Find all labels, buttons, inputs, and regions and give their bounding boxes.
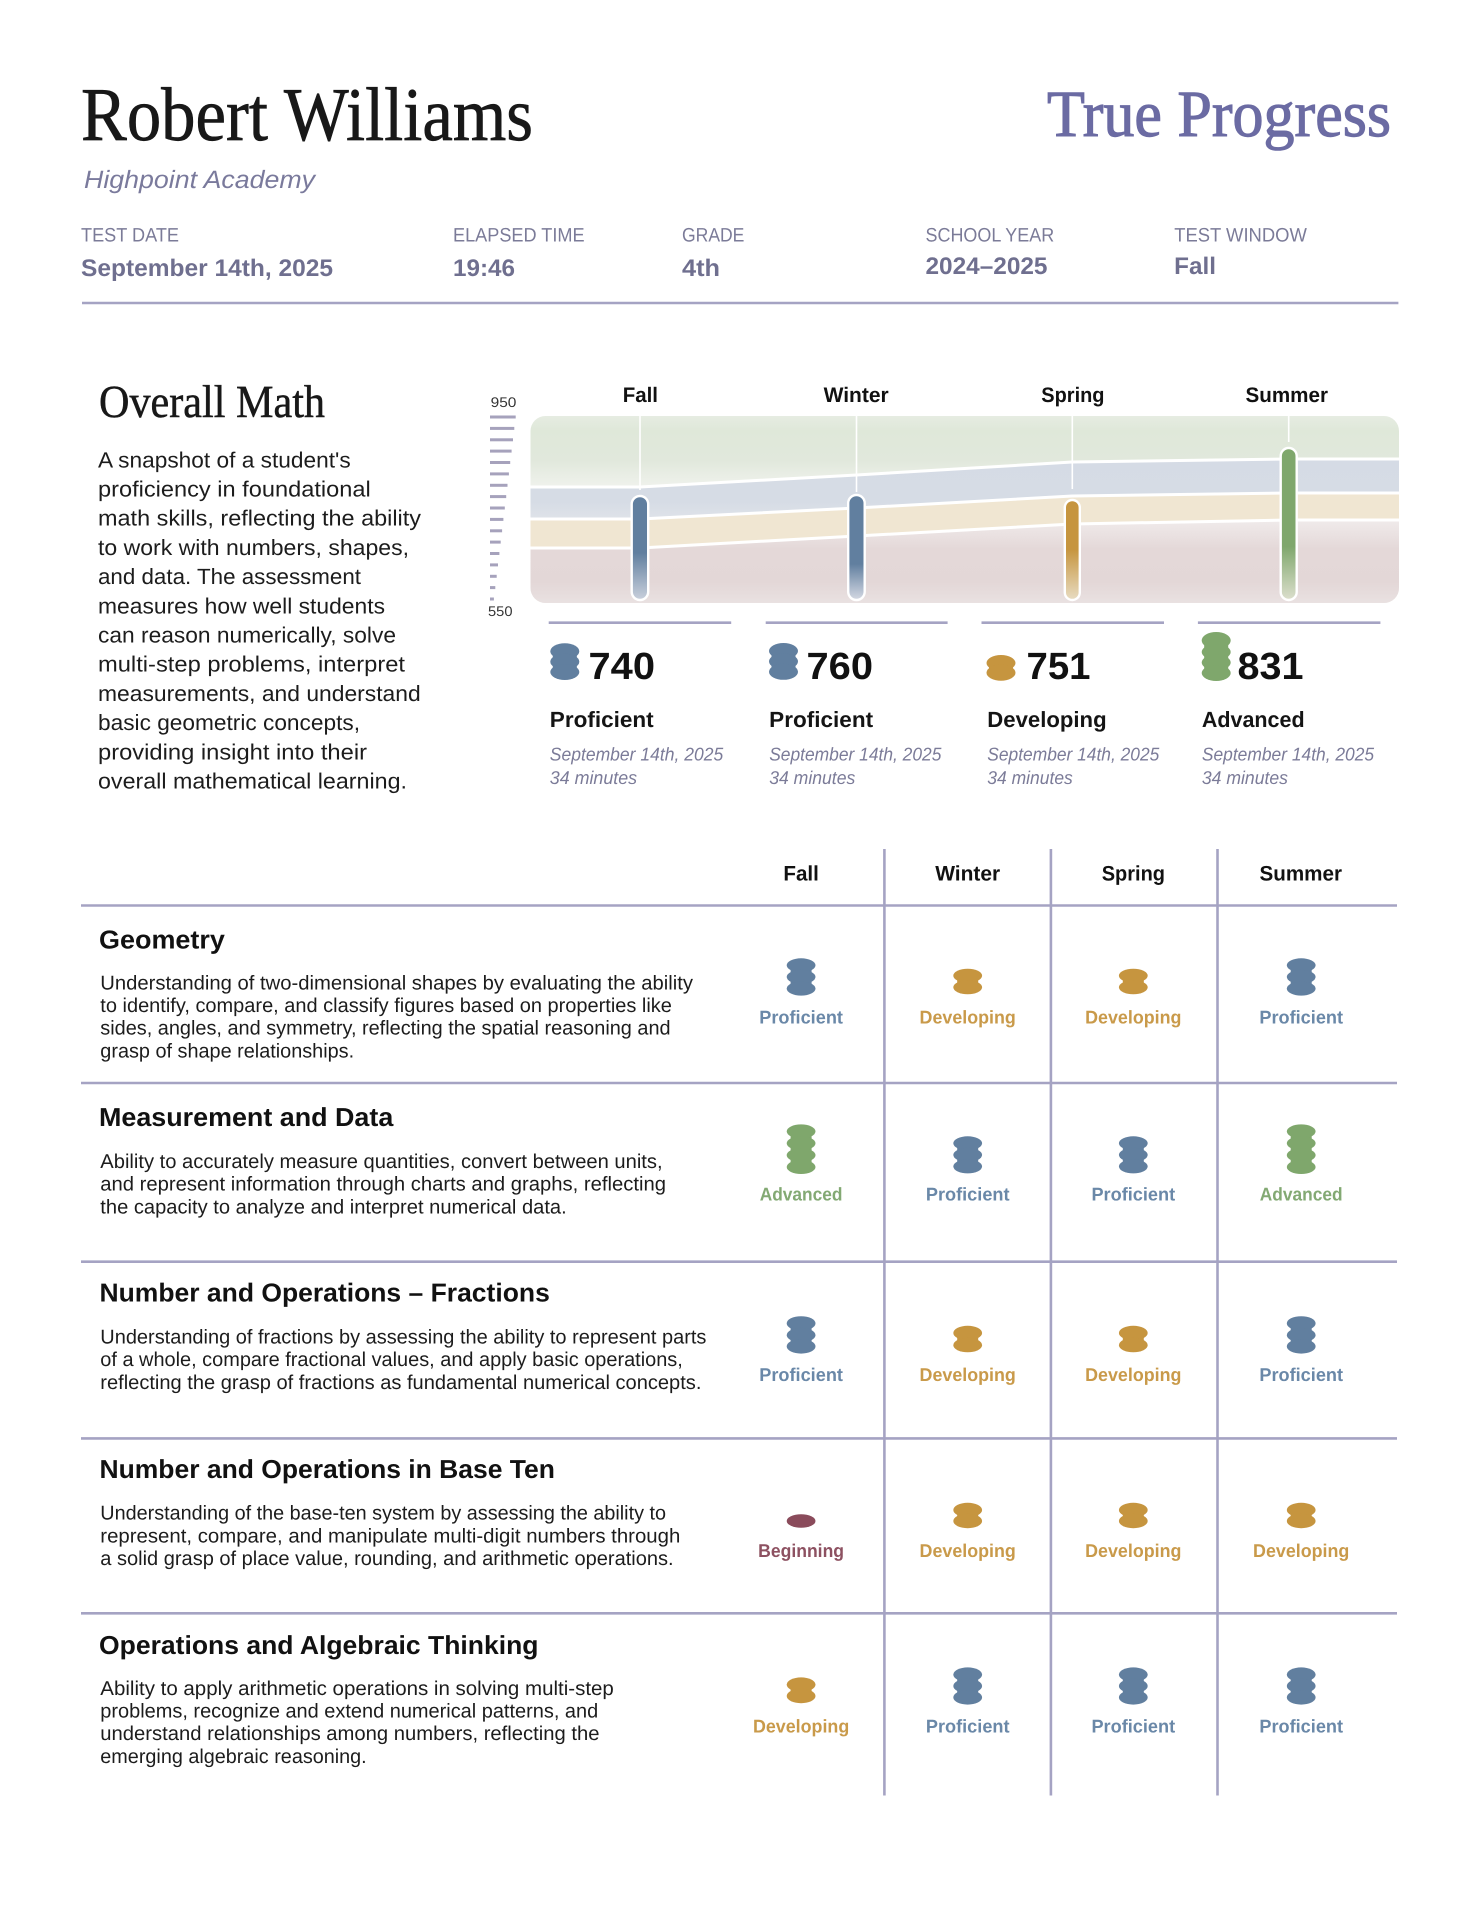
panel: overall math summary xyxy=(98,376,421,793)
row description: emerging algebraic reasoning. xyxy=(100,1746,367,1768)
result: spring developing: Developing xyxy=(1085,1364,1181,1385)
result: fall proficient xyxy=(759,1316,843,1385)
row description: a solid grasp of place value, rounding, and arithmetic operations. xyxy=(100,1548,674,1570)
result: fall developing: Developing xyxy=(753,1715,849,1736)
season labels: Winter xyxy=(824,384,889,407)
score card: fall xyxy=(549,623,731,788)
result: winter developing: Developing xyxy=(920,1364,1016,1385)
column headers: Spring xyxy=(1102,863,1165,886)
result: spring developing xyxy=(1085,1326,1181,1385)
result: winter proficient: Proficient xyxy=(926,1715,1010,1736)
date and duration: September 14th, 2025 xyxy=(987,744,1160,765)
brand title: True Progress xyxy=(1047,78,1391,151)
score: 751 xyxy=(1026,646,1090,688)
row: number and operations fractions xyxy=(100,1278,1343,1394)
row description: Ability to apply arithmetic operations in solving multi-step xyxy=(100,1678,614,1700)
row: operations and algebraic thinking xyxy=(99,1630,1343,1768)
chart: score progress bands xyxy=(488,384,1399,619)
result: winter proficient xyxy=(926,1667,1010,1736)
icon: developing stack xyxy=(986,655,1016,681)
result: fall advanced: Advanced xyxy=(760,1184,842,1205)
school year xyxy=(926,224,1054,280)
row description: to identify, compare, and classify figures based on properties like xyxy=(100,995,672,1017)
row heading: Number and Operations – Fractions xyxy=(100,1278,550,1308)
test window xyxy=(1174,224,1307,280)
icon: advanced stack xyxy=(1202,632,1231,681)
test window: Fall xyxy=(1174,253,1216,280)
result: fall advanced xyxy=(760,1124,842,1205)
result: winter proficient: Proficient xyxy=(926,1184,1010,1205)
level: Proficient xyxy=(550,707,654,732)
result: spring proficient xyxy=(1091,1136,1175,1205)
row description: Understanding of two-dimensional shapes by evaluating the ability xyxy=(100,972,693,994)
result: summer advanced: Advanced xyxy=(1260,1184,1343,1205)
score: 740 xyxy=(588,646,655,688)
row description xyxy=(100,1151,666,1218)
date and duration xyxy=(1202,744,1375,788)
elapsed time: ELAPSED TIME xyxy=(453,224,585,246)
result: summer proficient: Proficient xyxy=(1259,1364,1343,1385)
score bars xyxy=(632,448,1297,600)
date and duration: 34 minutes xyxy=(550,767,637,788)
result: spring developing: Developing xyxy=(1085,1540,1181,1561)
result: summer developing: Developing xyxy=(1253,1540,1349,1561)
result: fall proficient: Proficient xyxy=(759,1364,843,1385)
row description: Ability to accurately measure quantities, convert between units, xyxy=(100,1151,663,1173)
score card: summer xyxy=(1198,623,1380,788)
test date: September 14th, 2025 xyxy=(81,255,333,282)
heading: overall math: Overall Math xyxy=(99,376,325,427)
column headers: Fall xyxy=(783,863,819,886)
column headers: Winter xyxy=(935,863,1000,886)
date and duration: September 14th, 2025 xyxy=(550,744,724,765)
row description: understand relationships among numbers, reflecting the xyxy=(100,1723,600,1745)
result: spring proficient: Proficient xyxy=(1091,1184,1175,1205)
description text: and data. The assessment xyxy=(98,564,361,589)
date and duration: 34 minutes xyxy=(987,767,1073,788)
result: fall beginning: Beginning xyxy=(758,1540,844,1561)
icon: proficient stack xyxy=(550,643,579,680)
student name: Robert Williams xyxy=(81,73,533,157)
result: summer advanced xyxy=(1260,1124,1343,1205)
bar: summer xyxy=(1281,448,1297,600)
date and duration: September 14th, 2025 xyxy=(1202,744,1375,765)
score: 831 xyxy=(1238,646,1304,688)
column headers xyxy=(783,863,1342,886)
result: summer proficient xyxy=(1259,958,1343,1027)
school year: 2024–2025 xyxy=(926,253,1048,280)
proficiency bands xyxy=(530,416,1399,603)
result: winter developing xyxy=(920,969,1016,1027)
row heading: Operations and Algebraic Thinking xyxy=(99,1630,538,1660)
score card: winter xyxy=(766,623,948,788)
result: spring developing xyxy=(1085,1503,1181,1561)
description text: to work with numbers, shapes, xyxy=(98,535,409,560)
description text: measures how well students xyxy=(98,593,385,618)
result: fall proficient xyxy=(759,958,843,1027)
elapsed time: 19:46 xyxy=(453,255,515,282)
date and duration xyxy=(987,744,1160,788)
season labels: Spring xyxy=(1041,384,1104,407)
date and duration: 34 minutes xyxy=(769,767,855,788)
result: summer proficient: Proficient xyxy=(1259,1715,1343,1736)
row description: problems, recognize and extend numerical patterns, and xyxy=(100,1701,598,1723)
row description xyxy=(100,1326,706,1394)
result: spring developing xyxy=(1085,969,1181,1027)
result: fall proficient: Proficient xyxy=(759,1006,843,1027)
table: domain results xyxy=(81,849,1397,1796)
description text: providing insight into their xyxy=(98,739,367,764)
score scale xyxy=(488,394,517,619)
row: measurement and data xyxy=(99,1102,1343,1218)
result: summer proficient xyxy=(1259,1316,1343,1385)
row description: Understanding of the base-ten system by assessing the ability to xyxy=(100,1503,666,1525)
description text: basic geometric concepts, xyxy=(98,710,360,735)
season labels: Fall xyxy=(623,384,658,407)
icon: proficient stack xyxy=(769,643,798,680)
school name: Highpoint Academy xyxy=(84,166,317,194)
test date xyxy=(81,224,333,282)
result: fall beginning xyxy=(758,1514,844,1561)
result: winter proficient xyxy=(926,1136,1010,1205)
level: Proficient xyxy=(769,707,874,732)
test metadata xyxy=(81,224,1307,282)
description text: math skills, reflecting the ability xyxy=(98,506,421,531)
description text: multi-step problems, interpret xyxy=(98,652,405,677)
row description: sides, angles, and symmetry, reflecting the spatial reasoning and xyxy=(100,1018,671,1040)
row heading: Measurement and Data xyxy=(99,1102,394,1132)
result: winter developing xyxy=(920,1326,1016,1385)
row: number and operations in base ten xyxy=(100,1454,1349,1570)
season labels: Summer xyxy=(1246,384,1328,407)
row description: and represent information through charts and graphs, reflecting xyxy=(100,1174,666,1196)
report page xyxy=(81,86,1399,1796)
grade: GRADE xyxy=(682,224,744,246)
elapsed time xyxy=(453,224,585,282)
result: spring developing: Developing xyxy=(1085,1006,1181,1027)
date and duration xyxy=(769,744,942,788)
row description: represent, compare, and manipulate multi-digit numbers through xyxy=(100,1525,680,1547)
row description: the capacity to analyze and interpret numerical data. xyxy=(100,1196,567,1218)
row description: grasp of shape relationships. xyxy=(100,1041,354,1063)
description text: measurements, and understand xyxy=(98,681,421,706)
school year: SCHOOL YEAR xyxy=(926,224,1054,246)
description text: overall mathematical learning. xyxy=(98,768,407,793)
description text: can reason numerically, solve xyxy=(98,623,396,648)
score scale: 950 xyxy=(491,394,517,410)
date and duration: 34 minutes xyxy=(1202,767,1288,788)
row description: Understanding of fractions by assessing the ability to represent parts xyxy=(100,1326,706,1348)
row heading: Number and Operations in Base Ten xyxy=(100,1454,555,1484)
result: winter developing: Developing xyxy=(920,1006,1016,1027)
row description xyxy=(100,1678,614,1768)
result: summer proficient: Proficient xyxy=(1259,1006,1343,1027)
bar: winter xyxy=(848,495,865,600)
row description: of a whole, compare fractional values, and apply basic operations, xyxy=(100,1349,683,1371)
test window: TEST WINDOW xyxy=(1174,224,1307,246)
result: summer proficient xyxy=(1259,1667,1343,1736)
header xyxy=(81,73,1391,194)
result: winter developing xyxy=(920,1503,1016,1561)
date and duration: September 14th, 2025 xyxy=(769,744,942,765)
description text xyxy=(98,447,421,793)
description text: A snapshot of a student's xyxy=(98,447,351,472)
result: spring proficient xyxy=(1091,1667,1175,1736)
result: summer developing xyxy=(1253,1503,1349,1561)
row heading: Geometry xyxy=(99,924,225,954)
grade xyxy=(682,224,744,282)
date and duration xyxy=(550,744,724,788)
column headers: Summer xyxy=(1260,863,1342,886)
level: Advanced xyxy=(1202,707,1305,732)
result: fall developing xyxy=(753,1677,849,1736)
season labels xyxy=(623,384,1328,407)
bar: fall xyxy=(632,496,648,600)
table grid xyxy=(81,849,1397,1796)
bar: spring xyxy=(1065,500,1080,600)
test date: TEST DATE xyxy=(81,224,179,246)
score: 760 xyxy=(806,646,873,688)
score card: spring xyxy=(982,623,1164,788)
result: winter developing: Developing xyxy=(920,1540,1016,1561)
result: spring proficient: Proficient xyxy=(1091,1715,1175,1736)
description text: proficiency in foundational xyxy=(98,477,371,502)
row: geometry xyxy=(99,924,1343,1063)
level: Developing xyxy=(987,707,1107,732)
row description xyxy=(100,1503,680,1570)
score scale: 550 xyxy=(488,603,513,619)
row description: reflecting the grasp of fractions as fundamental numerical concepts. xyxy=(100,1372,701,1394)
row description xyxy=(100,972,693,1063)
grade: 4th xyxy=(682,255,720,282)
